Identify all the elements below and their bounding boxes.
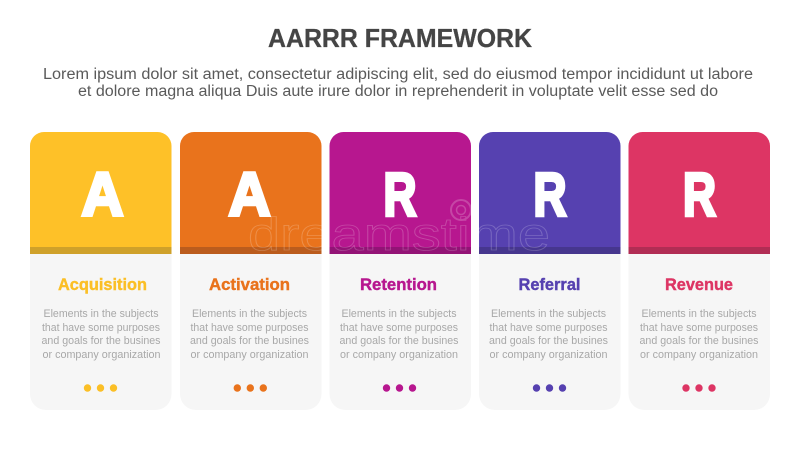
panel: referral (479, 132, 620, 410)
panel: activation: or company organization (190, 349, 308, 361)
panel: acquisition: or company organization (42, 349, 160, 361)
panel: activation: A (228, 160, 270, 228)
panel: acquisition (30, 132, 172, 410)
intro paragraph (43, 66, 753, 100)
panel: referral: Referral (518, 276, 580, 294)
panel: referral: or company organization (490, 349, 608, 361)
panel: revenue: R (683, 160, 716, 228)
panel: acquisition: that have some purposes (42, 322, 161, 334)
panel: revenue (628, 132, 770, 410)
title: AARRR FRAMEWORK (268, 23, 532, 53)
panel: retention: Elements in the subjects (342, 308, 457, 320)
panel: revenue: or company organization (640, 349, 758, 361)
panel: referral: and goals for the busines (489, 335, 609, 347)
panel: activation: and goals for the busines (190, 335, 310, 347)
panel: activation: Elements in the subjects (192, 308, 308, 320)
panel: activation: Activation (209, 276, 290, 294)
panel: revenue: that have some purposes (640, 322, 759, 334)
intro paragraph: Lorem ipsum dolor sit amet, consectetur adipiscing elit, sed do eiusmod tempor incididunt ut labore (43, 66, 753, 83)
panel: retention (330, 132, 471, 410)
panel: activation: that have some purposes (190, 322, 309, 334)
panel: retention: R (384, 160, 416, 228)
panel: acquisition: A (82, 160, 124, 228)
panel: revenue: Elements in the subjects (642, 308, 757, 320)
panel: acquisition: Acquisition (58, 276, 147, 294)
panel: referral: R (534, 160, 566, 228)
panel: activation (180, 132, 322, 410)
panel: acquisition: Elements in the subjects (44, 308, 159, 320)
panel: retention: or company organization (340, 349, 458, 361)
panel: retention: and goals for the busines (340, 335, 459, 347)
panel: retention: Retention (360, 276, 437, 294)
panel: revenue: Revenue (665, 276, 733, 294)
watermark: dreamstime (248, 208, 550, 260)
panel: revenue: and goals for the busines (640, 335, 759, 347)
panel: acquisition: and goals for the busines (42, 335, 161, 347)
panel: referral: Elements in the subjects (491, 308, 607, 320)
watermark (248, 200, 550, 260)
panel: referral: that have some purposes (490, 322, 608, 334)
intro paragraph: et dolore magna aliqua Duis aute irure dolor in reprehenderit in voluptate velit esse sed do (78, 83, 718, 100)
panel: retention: that have some purposes (340, 322, 459, 334)
